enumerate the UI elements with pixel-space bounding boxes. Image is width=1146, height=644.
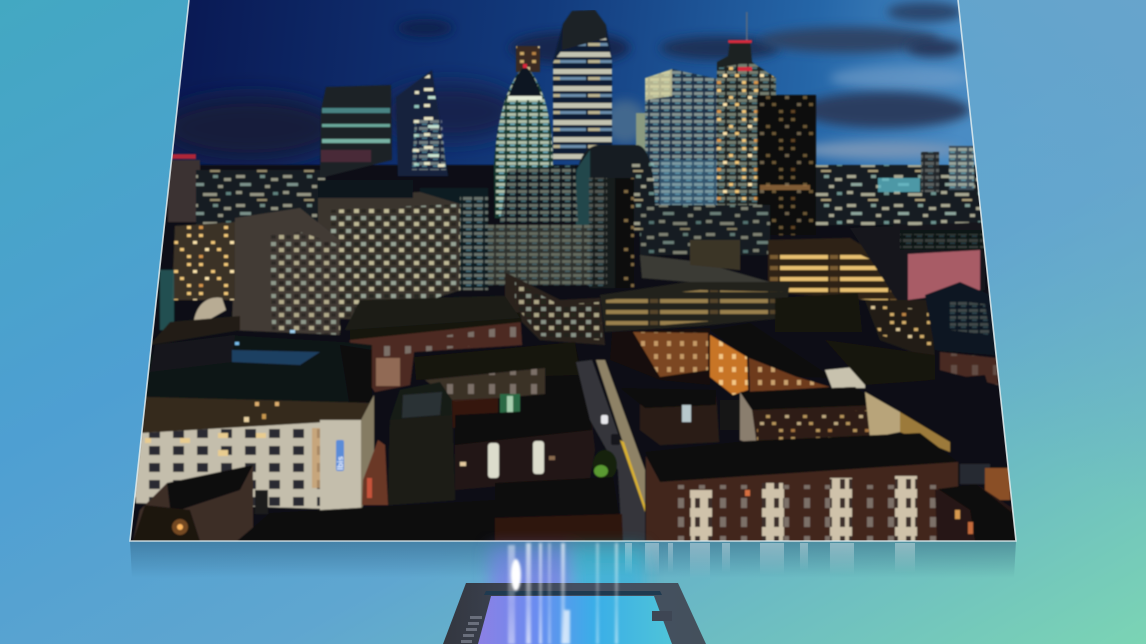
building: hotel upper brown band (142, 397, 372, 434)
building: centre dark roof (414, 342, 590, 428)
building: upper right roofs (775, 282, 998, 385)
building: brick mid right (738, 386, 870, 442)
tower: Gherkin (494, 46, 553, 218)
building: dark roofs right with tan side (863, 375, 1010, 500)
building: foreground dark roof (237, 477, 623, 541)
building: left low block (150, 222, 240, 345)
tower: rounded-top centre block (576, 145, 656, 232)
chip right clip (652, 611, 672, 621)
city layers softened (120, 10, 1020, 545)
building: small brown by street (620, 388, 740, 445)
reflection shadow below photo (130, 541, 1016, 578)
building: large brick terrace foreground (645, 433, 958, 541)
building: brick with small windows (345, 296, 522, 392)
building: scaffolded block (388, 382, 455, 505)
chip device (443, 583, 706, 644)
building: tan office front (232, 208, 340, 335)
building: tan office (318, 180, 460, 320)
photo edge outline (130, 0, 1016, 541)
tower: left dark block (320, 85, 392, 178)
chip left contacts (461, 616, 482, 643)
street (576, 360, 645, 541)
city base (120, 165, 1020, 545)
hotel sign: Ibis (336, 456, 345, 470)
building: rooftop deck left (145, 330, 372, 408)
chip body (443, 583, 706, 644)
tower: Tower 42 with spire (717, 12, 776, 220)
chip top rail (484, 591, 662, 595)
reflected window light strips (625, 543, 915, 579)
tower: dark block (757, 95, 816, 235)
building: long terrace (505, 240, 790, 345)
light beam glow (490, 546, 645, 596)
sky (172, 0, 975, 166)
far city left (168, 154, 326, 225)
building: brown with lit stair towers (455, 408, 595, 490)
building: white hotel with sign (134, 395, 374, 510)
tower: centre slab (589, 178, 634, 288)
building: warm striped block right (768, 238, 898, 302)
buildings: mid glass row (488, 205, 770, 285)
chip screen (478, 596, 672, 644)
tower: 22 Bishopsgate (553, 10, 612, 160)
building: low glass behind centre (500, 165, 578, 222)
building: dark roof + pink wall (850, 222, 985, 302)
vertical light beams (508, 543, 618, 644)
building: corner foreground right (935, 484, 1018, 541)
building: blue-lit block (420, 188, 488, 290)
building: lit alley (362, 440, 388, 505)
building: foreground small with lamp (133, 465, 268, 541)
buildings: orange lit terraces (610, 323, 935, 395)
tower: right glass block (636, 69, 720, 205)
tower: Scalpel (396, 70, 448, 176)
photo panel: night city skyline (120, 0, 1020, 545)
far city right (816, 146, 981, 225)
